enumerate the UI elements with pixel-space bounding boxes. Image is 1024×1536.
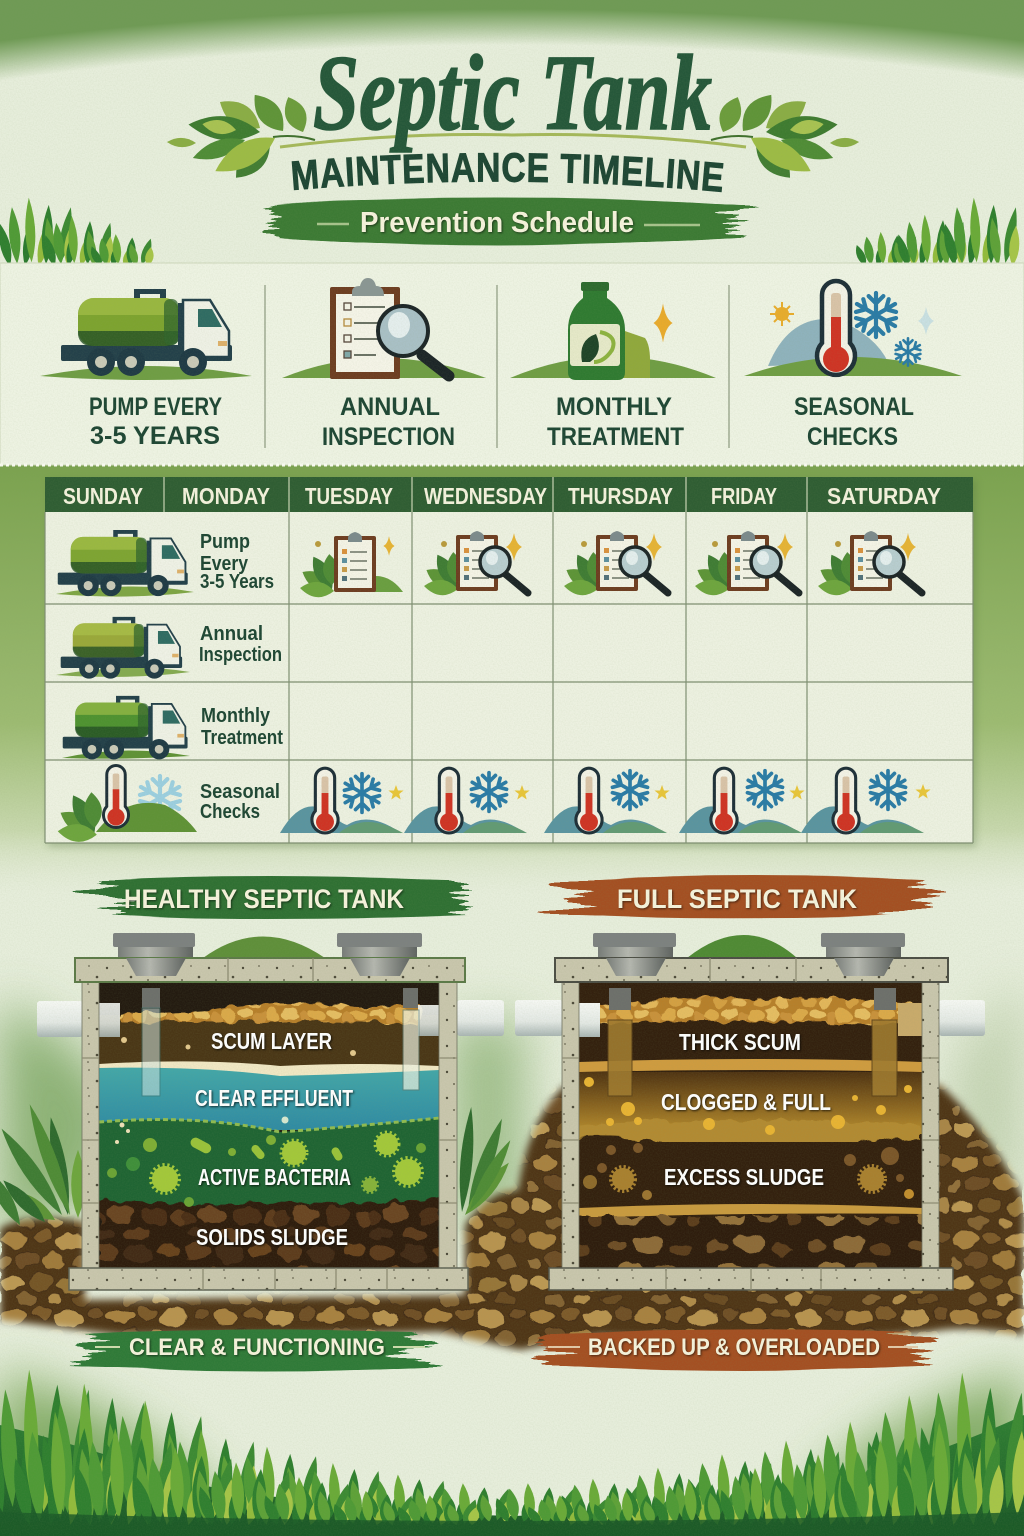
banner: backed up and overloaded	[545, 1329, 920, 1371]
title script: Septic Tank	[313, 34, 712, 153]
grass: top corners	[0, 197, 1021, 267]
row: pump: Every	[200, 553, 249, 575]
diagram: full tank	[515, 933, 985, 1290]
bottom sludge	[579, 1214, 922, 1268]
wednesday seasonal	[404, 768, 530, 833]
label: clear effluent: CLEAR EFFLUENT	[195, 1085, 353, 1111]
banner: clear and functioning: CLEAR & FUNCTIONING	[129, 1334, 385, 1361]
banner: backed up and overloaded: BACKED UP & OVERLOADED	[588, 1334, 880, 1361]
manhole lids	[593, 933, 905, 975]
manhole lids	[113, 933, 422, 975]
concrete walls	[69, 958, 468, 1290]
row: annual: Inspection	[199, 644, 282, 666]
label: pump: 3-5 YEARS	[90, 422, 220, 450]
label: seasonal: SEASONAL	[794, 393, 914, 421]
table header: SATURDAY	[827, 483, 941, 509]
row: pump: Pump	[200, 531, 250, 553]
banner dashes	[317, 224, 700, 225]
grass beside healthy tank	[0, 1102, 515, 1228]
brush banner	[272, 198, 736, 246]
tank layers	[99, 982, 439, 1275]
row: pump	[56, 530, 274, 597]
thursday seasonal	[544, 768, 670, 833]
row: annual: Annual	[200, 623, 263, 645]
water	[99, 1068, 439, 1130]
table header	[45, 477, 973, 512]
label: pump	[89, 393, 222, 450]
icon: seasonal	[744, 281, 962, 376]
label: scum layer: SCUM LAYER	[211, 1028, 332, 1054]
friday seasonal	[679, 768, 805, 833]
row: seasonal: Checks	[200, 801, 260, 823]
heading: full septic tank: FULL SEPTIC TANK	[617, 884, 857, 914]
pipes full tank	[515, 1000, 985, 1036]
table header: WEDNESDAY	[424, 483, 547, 509]
inner pipe stubs	[99, 988, 439, 1096]
clumps	[583, 1167, 914, 1200]
tuesday clipboard	[299, 532, 403, 599]
thursday inspection	[563, 531, 668, 597]
banner: clear and functioning	[90, 1329, 425, 1372]
table header: TUESDAY	[305, 483, 393, 509]
thick scum	[579, 996, 922, 1026]
concrete walls	[549, 958, 953, 1290]
wednesday inspection	[423, 531, 528, 597]
friday inspection	[694, 531, 799, 597]
subtitle: MAINTENANCE TIMELINE	[292, 152, 724, 192]
green layer	[99, 1118, 439, 1210]
panel: weekly schedule table	[45, 477, 976, 847]
tuesday seasonal	[280, 768, 404, 833]
inner pipe stubs	[579, 988, 922, 1096]
banner text: Prevention Schedule	[360, 207, 634, 239]
soil ground around tanks	[0, 1080, 1024, 1356]
table header: FRIDAY	[711, 483, 777, 509]
label: solids sludge: SOLIDS SLUDGE	[196, 1224, 348, 1250]
row: monthly: Monthly	[201, 705, 271, 727]
row: seasonal: Seasonal	[200, 781, 280, 803]
gold line	[579, 1204, 922, 1218]
label: seasonal	[794, 393, 914, 451]
vine underline	[280, 134, 746, 147]
table header: SUNDAY	[63, 483, 143, 509]
heading: full septic tank	[572, 875, 918, 918]
clogged layer	[579, 1072, 922, 1134]
title block	[167, 34, 859, 246]
label: clogged and full: CLOGGED & FULL	[661, 1089, 831, 1115]
row: monthly	[62, 696, 283, 759]
saturday inspection	[817, 531, 922, 597]
label: active bacteria: ACTIVE BACTERIA	[198, 1164, 351, 1190]
label: excess sludge: EXCESS SLUDGE	[664, 1164, 824, 1190]
label: annual	[322, 393, 455, 451]
heading: healthy septic tank: HEALTHY SEPTIC TANK	[124, 884, 404, 914]
label: monthly: MONTHLY	[556, 393, 672, 421]
grass mound	[203, 936, 325, 958]
label: annual: ANNUAL	[340, 393, 440, 421]
excess sludge	[638, 1142, 875, 1150]
panel: maintenance icons	[0, 263, 1024, 465]
icon: treatment bottle	[510, 282, 716, 380]
label: pump: PUMP EVERY	[89, 393, 222, 421]
row: pump: 3-5 Years	[200, 571, 274, 593]
laurel left	[167, 88, 315, 186]
bacteria	[107, 1037, 426, 1207]
label: thick scum: THICK SCUM	[679, 1029, 801, 1055]
row: annual	[56, 617, 282, 679]
grass: bottom border	[0, 1369, 1024, 1536]
label: monthly	[547, 393, 684, 451]
heading: healthy septic tank	[110, 876, 460, 919]
table header: THURSDAY	[568, 483, 673, 509]
row: seasonal	[56, 766, 280, 843]
cream band	[99, 1061, 439, 1078]
label: annual: INSPECTION	[322, 423, 455, 451]
row: monthly: Treatment	[201, 727, 283, 749]
pipes left tank	[37, 1000, 504, 1037]
diagram: healthy tank	[37, 933, 504, 1290]
laurel right	[711, 88, 859, 186]
scum layer	[120, 1004, 420, 1024]
grass mound	[687, 935, 797, 958]
sludge	[99, 1198, 439, 1275]
saturday seasonal	[801, 768, 931, 833]
label: monthly: TREATMENT	[547, 423, 684, 451]
tank layers	[570, 982, 930, 1276]
icon: clipboard and magnifier	[282, 278, 486, 379]
icon: truck	[40, 289, 252, 380]
label: seasonal: CHECKS	[807, 423, 898, 451]
table header: MONDAY	[182, 483, 270, 509]
gold band	[579, 1059, 922, 1072]
